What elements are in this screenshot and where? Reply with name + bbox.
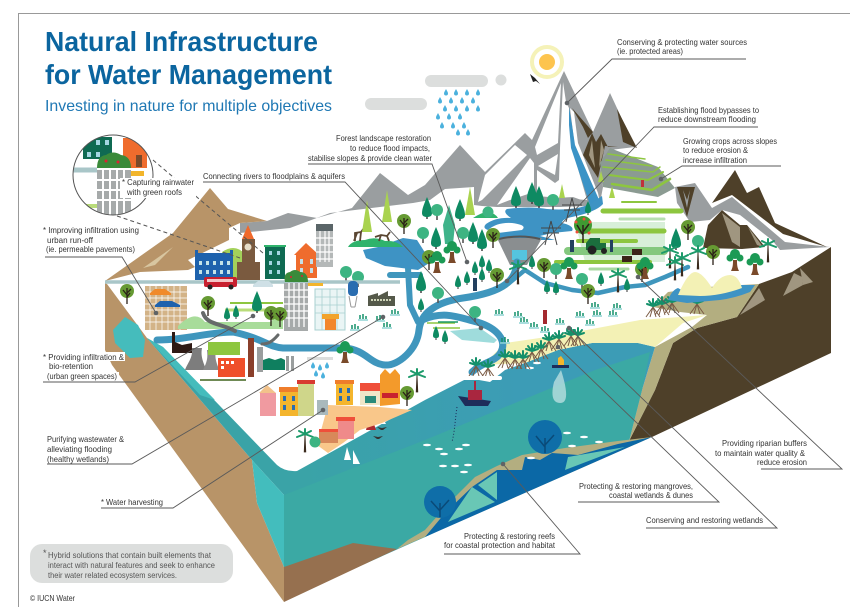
mountains: grey range bbox=[240, 71, 635, 233]
water tower and factory bbox=[348, 281, 395, 307]
subtitle: Investing in nature for multiple objectives bbox=[45, 98, 332, 115]
glass tower and shop bbox=[315, 289, 345, 330]
coastal sand and reef bbox=[397, 437, 652, 549]
bus and cars bbox=[204, 277, 323, 290]
callout: forest landscape restoration: Forest landscape restoration bbox=[336, 133, 431, 143]
callout: mangroves: Protecting & restoring mangroves, bbox=[579, 481, 693, 491]
callout: crops across slopes: increase infiltration bbox=[683, 155, 747, 165]
callout: forest landscape restoration: to reduce flood impacts, bbox=[350, 143, 430, 153]
city buildings bbox=[195, 224, 333, 280]
callout: healthy wetlands: Purifying wastewater & bbox=[47, 434, 124, 444]
terraced hillside bbox=[600, 148, 675, 197]
forest trees bbox=[120, 171, 776, 363]
permeable pavement bbox=[145, 286, 187, 330]
green roof magnifier inset bbox=[73, 135, 153, 216]
city road bbox=[105, 280, 400, 284]
icon: bird bbox=[530, 74, 540, 84]
coastal sand bbox=[317, 405, 412, 453]
ground shadow bbox=[497, 197, 587, 207]
meadow with deer bbox=[348, 228, 403, 247]
callout: flood bypasses: reduce downstream flooding bbox=[658, 114, 756, 124]
mangroves bbox=[469, 295, 704, 378]
callout: riparian buffers bbox=[636, 275, 842, 469]
estuary island stripes bbox=[427, 322, 460, 328]
callout: crops across slopes bbox=[659, 136, 781, 181]
fishing boat with net bbox=[552, 356, 569, 403]
icon: sun bbox=[532, 47, 562, 77]
copyright: © IUCN Water bbox=[30, 593, 75, 603]
callout: forest landscape restoration: stabilise slopes & provide clean water bbox=[308, 153, 432, 163]
power pylons bbox=[541, 198, 582, 245]
apple tree bbox=[574, 216, 592, 243]
left lake bbox=[363, 238, 431, 270]
callout: conserving water sources: (ie. protected areas) bbox=[617, 46, 683, 56]
footnote box: their water related ecosystem services. bbox=[48, 570, 177, 580]
callout: healthy wetlands bbox=[47, 315, 385, 464]
beach dunes bbox=[483, 315, 707, 365]
birds bbox=[373, 268, 413, 439]
callout: flood bypasses: Establishing flood bypasses to bbox=[658, 105, 759, 115]
wetland plants bbox=[350, 302, 622, 343]
right dark peaks bbox=[677, 170, 827, 247]
callout: reefs: for coastal protection and habitat bbox=[444, 540, 556, 550]
callout: green roofs bbox=[120, 177, 196, 198]
callout: reefs: Protecting & restoring reefs bbox=[464, 531, 555, 541]
callout: green roofs: * Capturing rainwater bbox=[122, 177, 194, 187]
footnote box: interact with natural features and seek to enhance bbox=[48, 560, 215, 570]
left pond bbox=[113, 317, 145, 358]
callout: rivers to floodplains: Connecting rivers to floodplains & aquifers bbox=[203, 171, 345, 181]
cows bbox=[622, 249, 642, 262]
right rock face bbox=[629, 247, 831, 441]
callout: crops across slopes: to reduce erosion & bbox=[683, 145, 748, 155]
callout: urban green spaces: (urban green spaces) bbox=[47, 371, 117, 381]
callout: water harvesting bbox=[101, 408, 325, 508]
right grey ridge bbox=[675, 183, 830, 250]
upper lake bbox=[484, 196, 603, 240]
brown mountain right bbox=[703, 210, 765, 249]
green field bands bbox=[556, 202, 681, 269]
callout: water harvesting: * Water harvesting bbox=[101, 497, 163, 507]
dashed zoom lines bbox=[117, 160, 263, 258]
title bbox=[45, 26, 332, 90]
callout: wetlands: Conserving and restoring wetlands bbox=[646, 515, 763, 525]
callout: permeable pavements: urban run-off bbox=[47, 235, 94, 245]
callout: riparian buffers: reduce erosion bbox=[757, 457, 807, 467]
title: for Water Management bbox=[45, 59, 332, 90]
callout: green roofs: with green roofs bbox=[126, 187, 182, 197]
sea bbox=[147, 338, 655, 600]
seabed bbox=[284, 543, 397, 602]
urban green spaces bbox=[178, 291, 287, 329]
green roof building bbox=[284, 270, 308, 331]
sandbar under mangroves bbox=[462, 376, 500, 380]
callout: permeable pavements: (ie. permeable pavements) bbox=[46, 244, 135, 254]
callout: permeable pavements: * Improving infiltration using bbox=[43, 225, 139, 235]
tractor and farmers bbox=[473, 238, 613, 324]
callout: mangroves bbox=[556, 345, 719, 502]
fish bbox=[423, 362, 603, 473]
mountains: dark crags bbox=[572, 108, 637, 178]
callout: urban green spaces: bio-retention bbox=[49, 361, 93, 371]
coral trees bbox=[424, 420, 562, 518]
callout: rivers to floodplains bbox=[203, 171, 483, 330]
footnote box: Hybrid solutions that contain built elements that bbox=[48, 550, 212, 560]
callout: permeable pavements bbox=[43, 225, 158, 315]
title: Natural Infrastructure bbox=[45, 26, 318, 57]
callout: flood bypasses bbox=[505, 105, 759, 283]
cargo boat bbox=[452, 381, 491, 442]
sailboats bbox=[344, 410, 386, 464]
callout: healthy wetlands: (healthy wetlands) bbox=[47, 454, 109, 464]
callout: healthy wetlands: alleviating flooding bbox=[47, 444, 112, 454]
smoke bbox=[203, 313, 278, 344]
callout: urban green spaces: * Providing infiltration & bbox=[43, 352, 124, 362]
dam bbox=[497, 236, 542, 265]
footnote box bbox=[30, 544, 233, 583]
callout: conserving water sources: Conserving & protecting water sources bbox=[617, 37, 747, 47]
callout: riparian buffers: Providing riparian buffers bbox=[722, 438, 807, 448]
callout: conserving water sources bbox=[565, 37, 747, 105]
callout: forest landscape restoration bbox=[308, 133, 469, 264]
rain over houses bbox=[307, 357, 333, 378]
coastal houses bbox=[259, 369, 425, 452]
callout: urban green spaces bbox=[42, 314, 255, 382]
estuary pool bbox=[450, 328, 497, 343]
industrial area bbox=[172, 332, 294, 380]
glacier river bbox=[569, 107, 600, 205]
callout: riparian buffers: to maintain water quality & bbox=[715, 448, 805, 458]
sand slope bbox=[629, 284, 759, 441]
callout: crops across slopes: Growing crops across slopes bbox=[683, 136, 777, 146]
snow facets bbox=[478, 82, 600, 205]
footnote box: * bbox=[43, 548, 47, 558]
rain drops bbox=[436, 89, 480, 136]
dune pond bbox=[668, 272, 755, 303]
callout: mangroves: coastal wetlands & dunes bbox=[609, 490, 693, 500]
rivers bbox=[157, 262, 688, 372]
land cliff: left brown side bbox=[105, 188, 284, 602]
callout: reefs bbox=[444, 462, 580, 554]
clouds bbox=[365, 74, 506, 110]
callout: wetlands bbox=[567, 326, 777, 528]
